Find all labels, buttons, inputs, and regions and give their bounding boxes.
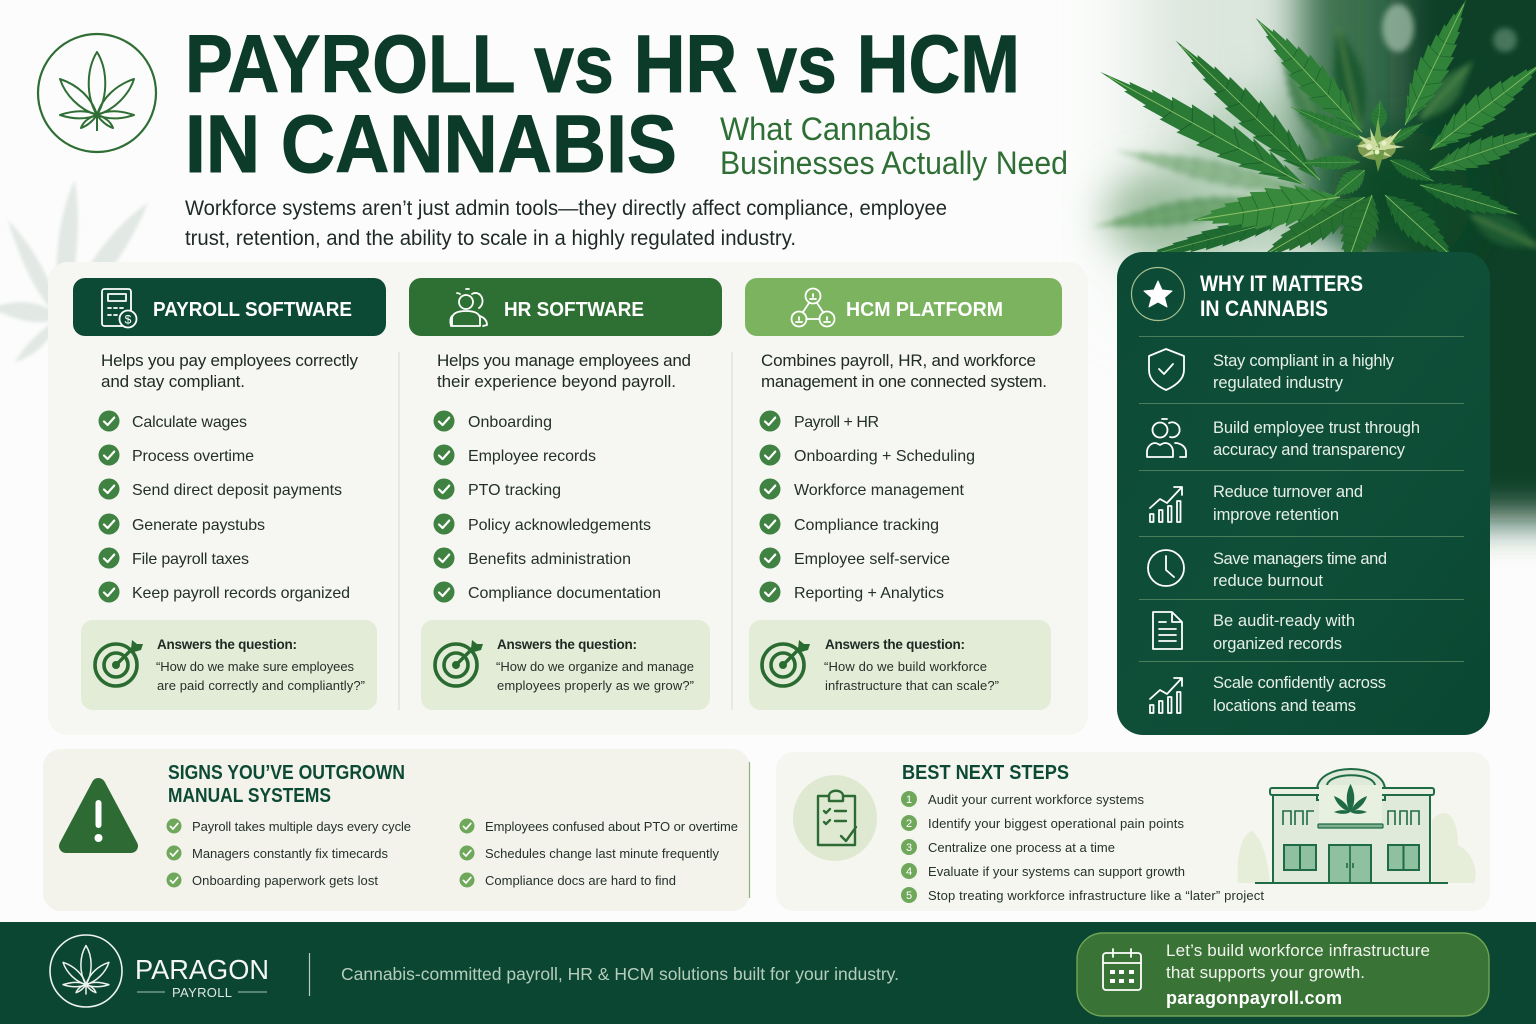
numbered steps: Audit your current workforce systems [928, 792, 1144, 807]
description: HR [437, 351, 691, 391]
checklist: HR: Compliance documentation [468, 585, 661, 602]
header: HR [409, 278, 722, 336]
header: HCM [745, 278, 1062, 336]
blurred background leaves [1090, 19, 1536, 263]
icon: star badge [1132, 268, 1184, 320]
subtitle: Businesses Actually Need [720, 145, 1068, 181]
description: HCM: Combines payroll, HR, and workforce [761, 351, 1036, 370]
reason: audit: organized records [1213, 635, 1342, 653]
reason: trust: accuracy and transparency [1213, 441, 1406, 459]
checklist: HCM: Reporting + Analytics [794, 585, 944, 602]
footer logo: PARAGON [135, 954, 269, 985]
footer tagline: Cannabis-committed payroll, HR & HCM solutions built for your industry. [341, 964, 899, 984]
heading: why it matters: IN CANNABIS [1200, 296, 1328, 321]
column: payroll software [73, 278, 386, 710]
subtitle [720, 111, 1068, 181]
reason: retention: improve retention [1213, 506, 1339, 524]
checklist: HR: Policy acknowledgements [468, 517, 651, 534]
intro text: trust, retention, and the ability to scale in a highly regulated industry. [185, 227, 796, 250]
callout: HR question: employees properly as we grow?” [497, 678, 694, 693]
reason: time [1148, 550, 1387, 590]
description: payroll: and stay compliant. [101, 372, 245, 391]
checklist: payroll: Process overtime [132, 448, 254, 465]
header: HCM: HCM PLATFORM [846, 299, 1003, 321]
checklist: HR [434, 410, 661, 602]
heading: why it matters: WHY IT MATTERS [1200, 271, 1363, 296]
description: HCM: management in one connected system. [761, 372, 1047, 391]
description: HCM [761, 351, 1047, 391]
callout: payroll question: are paid correctly and compliantly?” [157, 678, 365, 693]
reason: scale: locations and teams [1213, 697, 1356, 715]
reason: compliance: Stay compliant in a highly [1213, 352, 1395, 370]
checklist: signs right: Compliance docs are hard to find [485, 873, 676, 888]
header: payroll: PAYROLL SOFTWARE [153, 299, 352, 321]
header: HR: HR SOFTWARE [504, 299, 644, 321]
heading: next steps: BEST NEXT STEPS [902, 762, 1069, 784]
callout: HCM question [749, 620, 1051, 710]
checklist: payroll: Calculate wages [132, 414, 247, 431]
checklist: HCM: Workforce management [794, 482, 965, 499]
checklist: signs left: Onboarding paperwork gets lost [192, 873, 378, 888]
callout: payroll question [81, 620, 377, 710]
checklist: HR: Benefits administration [468, 551, 631, 568]
heading: why it matters [1200, 271, 1363, 321]
panel: why it matters [1117, 252, 1490, 735]
callout: HCM question: infrastructure that can scale?” [825, 678, 999, 693]
description: HR: Helps you manage employees and [437, 351, 691, 370]
call to action: paragonpayroll.com [1166, 988, 1342, 1008]
checklist: signs right: Employees confused about PTO or overtime [485, 819, 738, 834]
numbered steps: 5 [906, 890, 912, 902]
reason: time: Save managers time and [1213, 550, 1387, 568]
footer [0, 922, 1536, 1024]
checklist: HR: Onboarding [468, 414, 552, 431]
panel: comparison columns [48, 262, 1088, 735]
column: HCM platform [745, 278, 1062, 710]
checklist: signs left: Payroll takes multiple days every cycle [192, 819, 411, 834]
checklist: payroll: Keep payroll records organized [132, 585, 350, 602]
numbered steps: Evaluate if your systems can support growth [928, 864, 1185, 879]
callout: payroll question: Answers the question: [157, 637, 297, 652]
reason: scale: Scale confidently across [1213, 674, 1386, 692]
checklist: HR: PTO tracking [468, 482, 561, 499]
checklist: HCM: Onboarding + Scheduling [794, 448, 975, 465]
panel: best next steps [776, 752, 1490, 911]
reason: compliance [1149, 349, 1395, 392]
call to action: Let’s build workforce infrastructure [1166, 941, 1430, 960]
heading: signs: SIGNS YOU’VE OUTGROWN [168, 762, 405, 784]
illustration: dispensary building [1238, 769, 1476, 883]
callout: HR question [421, 620, 710, 710]
checklist: signs left [166, 818, 411, 888]
intro text: Workforce systems aren’t just admin tools—they directly affect compliance, employee [185, 197, 947, 220]
checklist: signs right [460, 818, 738, 888]
numbered steps: 1 [906, 794, 912, 806]
heading: signs: MANUAL SYSTEMS [168, 785, 331, 807]
reason: retention [1150, 483, 1363, 524]
intro text [185, 197, 947, 250]
header: payroll: $ [125, 312, 132, 326]
reason: retention: Reduce turnover and [1213, 483, 1363, 501]
checklist: HR: Employee records [468, 448, 596, 465]
numbered steps: 4 [906, 866, 912, 878]
checklist: HCM: Compliance tracking [794, 517, 939, 534]
reason: audit: Be audit-ready with [1213, 612, 1355, 630]
checklist: HCM: Employee self-service [794, 551, 950, 568]
photo: cannabis plant [1090, 0, 1536, 520]
title: IN CANNABIS [185, 99, 677, 190]
footer logo: PAYROLL [172, 985, 232, 1000]
callout: HR question: Answers the question: [497, 637, 637, 652]
checklist: payroll: Generate paystubs [132, 517, 265, 534]
call to action: that supports your growth. [1166, 963, 1365, 982]
callout: HCM question: “How do we build workforce [824, 659, 987, 674]
footer logo [50, 935, 269, 1007]
numbered steps: 3 [906, 842, 912, 854]
description: payroll: Helps you pay employees correctly [101, 351, 358, 370]
numbered steps: Centralize one process at a time [928, 840, 1115, 855]
checklist: signs left: Managers constantly fix timecards [192, 846, 388, 861]
checklist: payroll: Send direct deposit payments [132, 482, 342, 499]
watermark leaf [0, 180, 148, 362]
subtitle: What Cannabis [720, 111, 931, 147]
bud [1356, 118, 1405, 172]
icon: clipboard [793, 775, 877, 861]
description: HR: their experience beyond payroll. [437, 372, 676, 391]
reason: scale [1150, 674, 1386, 715]
reason: compliance: regulated industry [1213, 374, 1344, 392]
reason: time: reduce burnout [1213, 572, 1323, 590]
column: HR software [409, 278, 722, 710]
numbered steps: Stop treating workforce infrastructure like a “later” project [928, 888, 1264, 903]
sharp leaves [1092, 0, 1536, 277]
title: PAYROLL vs HR vs HCM [185, 19, 1020, 110]
numbered steps: 2 [906, 818, 912, 830]
logo badge [38, 34, 156, 152]
heading: signs [168, 762, 405, 807]
icon: warning triangle [66, 785, 131, 846]
numbered steps [901, 791, 1264, 903]
callout: HR question: “How do we organize and manage [496, 659, 694, 674]
callout: payroll question: “How do we make sure employees [156, 659, 354, 674]
checklist: signs right: Schedules change last minute frequently [485, 846, 720, 861]
description: payroll [101, 351, 358, 391]
checklist: HCM: Payroll + HR [794, 414, 879, 431]
numbered steps: Identify your biggest operational pain points [928, 816, 1184, 831]
callout: HCM question: Answers the question: [825, 637, 965, 652]
reason: trust [1147, 419, 1420, 459]
checklist: payroll: File payroll taxes [132, 551, 249, 568]
panel: signs you've outgrown manual systems [43, 749, 750, 911]
header: payroll [73, 278, 386, 336]
checklist: payroll [98, 410, 350, 602]
call to action [1077, 933, 1489, 1016]
reason: audit [1153, 612, 1355, 653]
reason: trust: Build employee trust through [1213, 419, 1420, 437]
checklist: HCM [760, 410, 975, 602]
title [185, 19, 1020, 190]
